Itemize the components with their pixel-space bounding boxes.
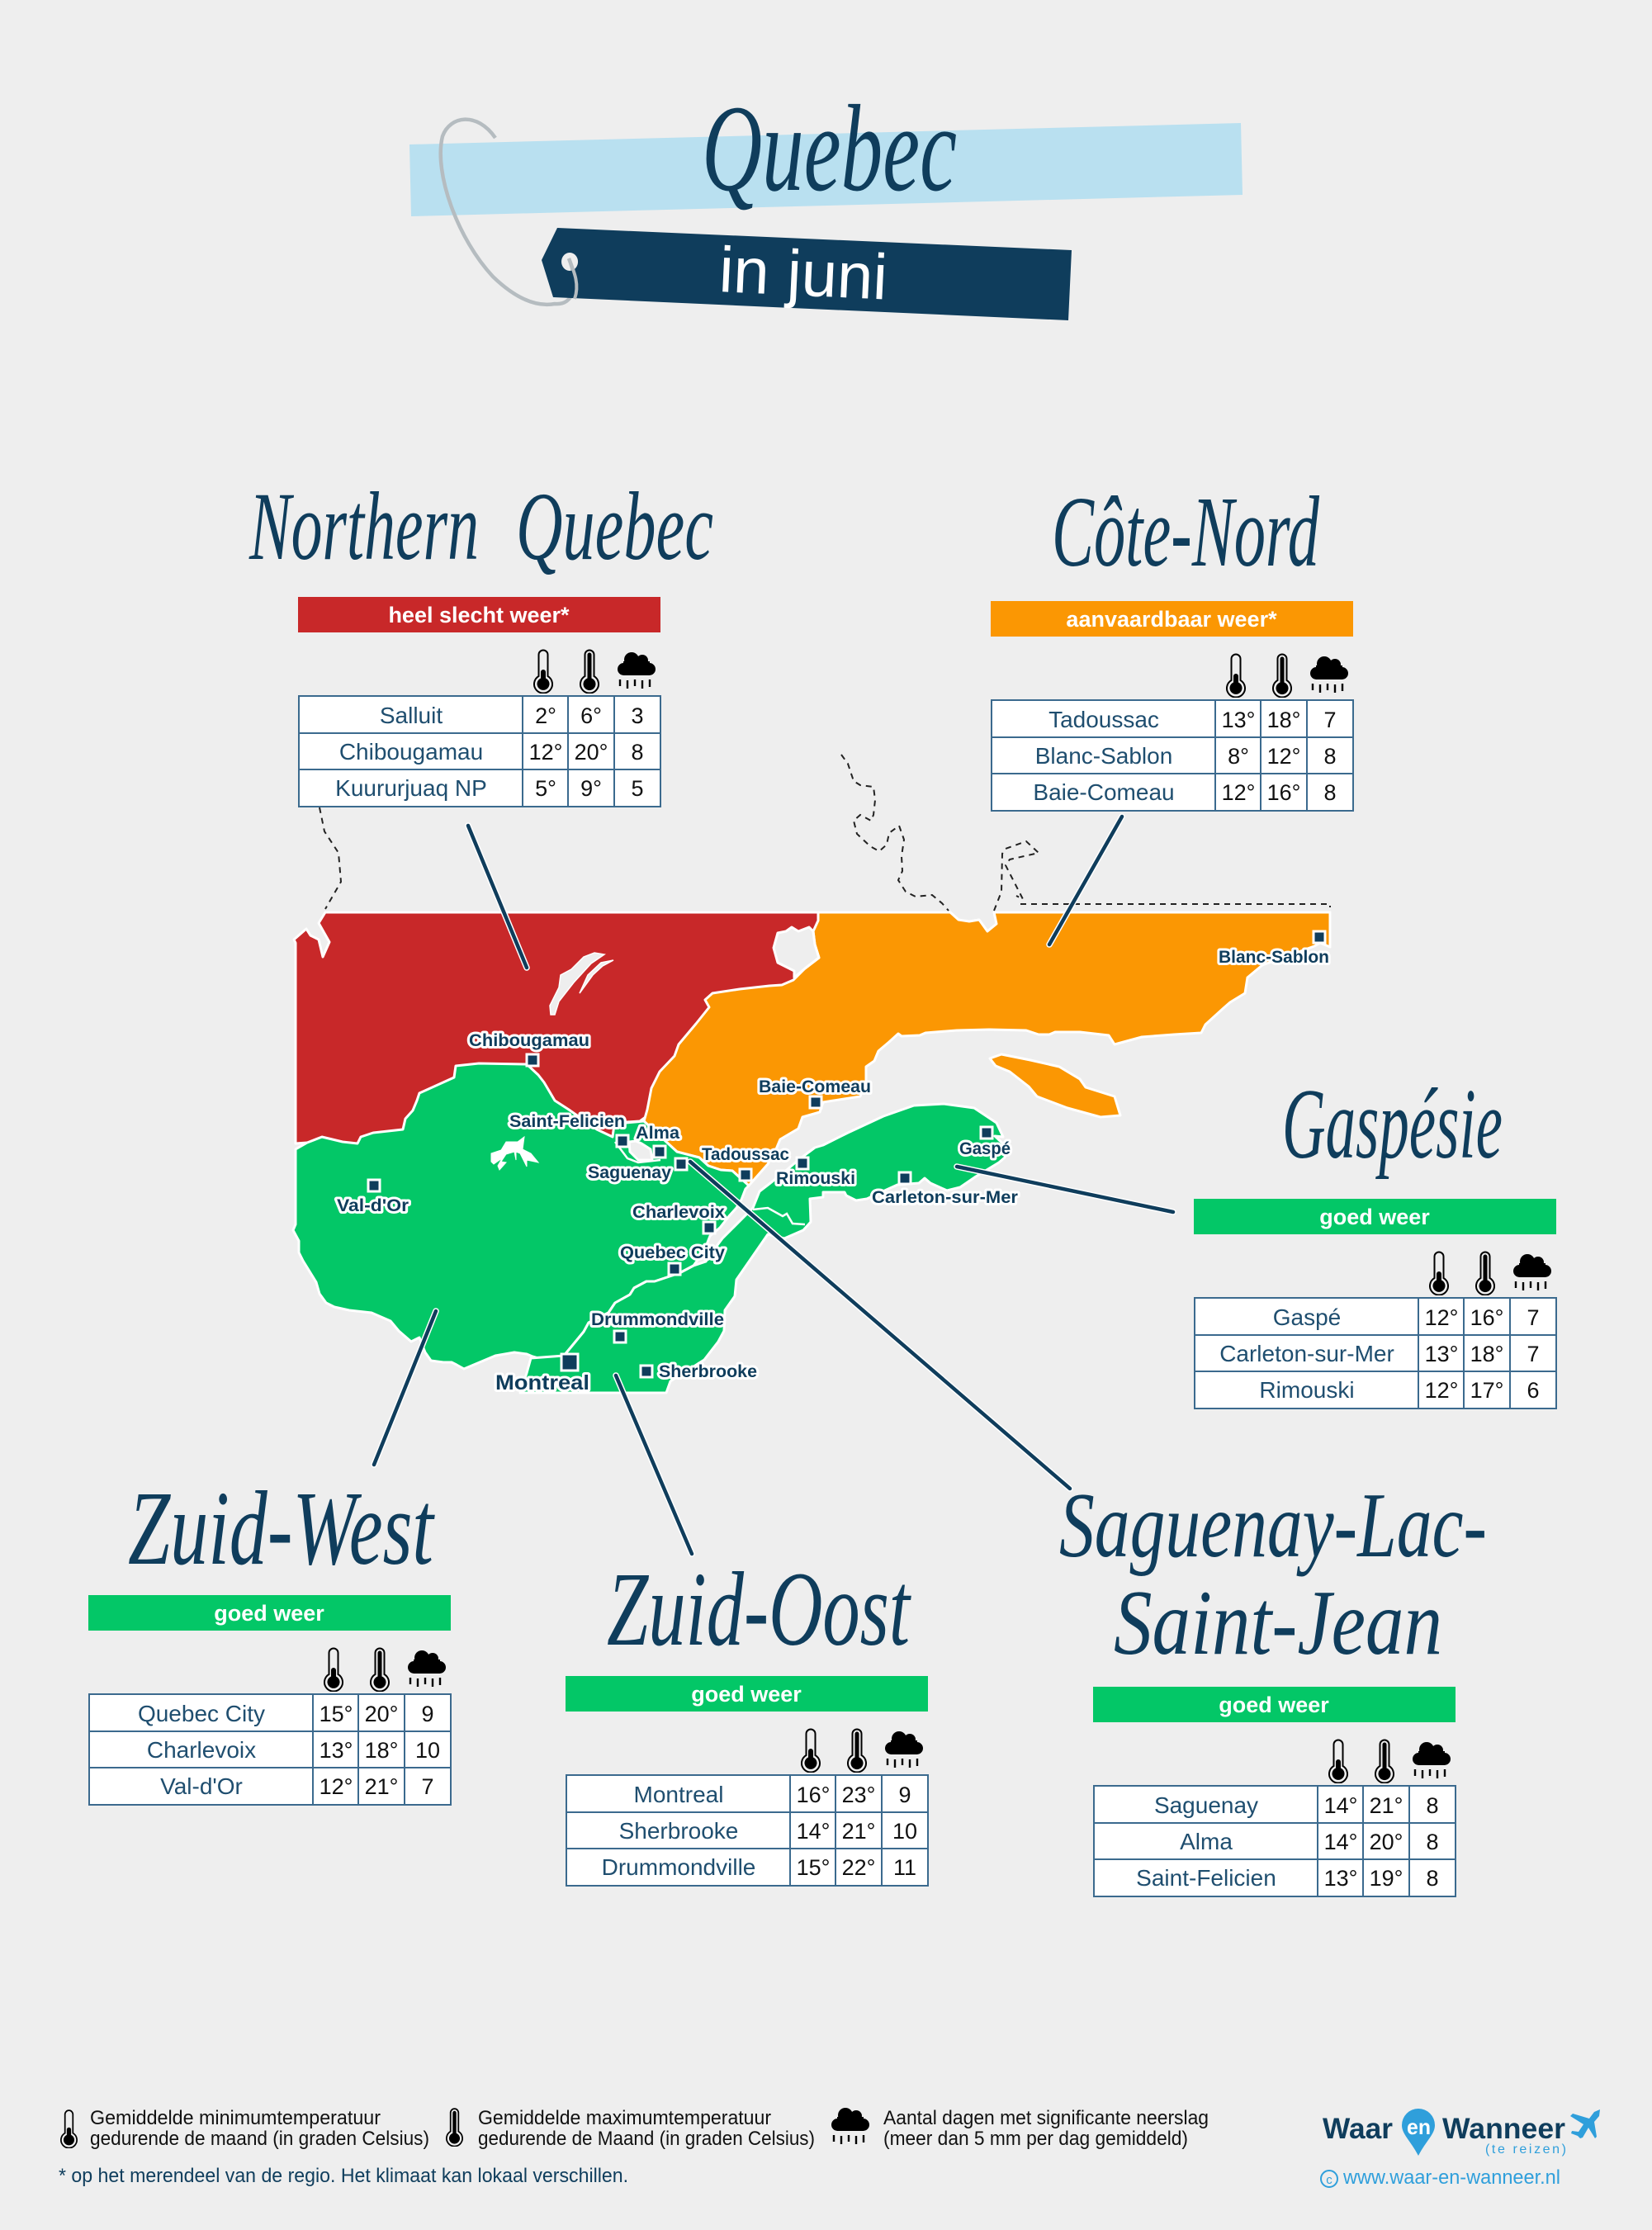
icons and table: 8 [631, 740, 644, 765]
city labels [337, 948, 1329, 1394]
weather band [991, 601, 1353, 637]
tag ring [441, 120, 574, 305]
icons and table: Carleton-sur-Mer [1219, 1341, 1394, 1366]
weather band [298, 597, 660, 632]
legend text: minimum temperature [90, 2107, 429, 2150]
city labels: Carleton-sur-Mer [872, 1188, 1018, 1207]
heading: Côte-Nord: Côte-Nord [1052, 476, 1320, 588]
weather band: goed weer [214, 1601, 324, 1626]
panel: Gaspésie [1194, 1068, 1556, 1409]
icons and table: 6 [1527, 1378, 1540, 1403]
city labels: Saint-Felicien [509, 1112, 625, 1131]
icons and table: 18° [365, 1738, 398, 1763]
city labels: Baie-Comeau [759, 1077, 871, 1096]
icons and table: 8 [1323, 780, 1337, 805]
weather band: goed weer [1319, 1205, 1430, 1229]
icons and table: 12° [1425, 1305, 1458, 1330]
legend text: rain: (meer dan 5 mm per dag gemiddeld) [883, 2128, 1188, 2150]
icons and table: 21° [842, 1819, 875, 1844]
footnote: * op het merendeel van de regio. Het klimaat kan lokaal verschillen. [59, 2165, 628, 2187]
icons and table: 16° [797, 1783, 830, 1807]
icons and table: 8 [1426, 1866, 1439, 1891]
city labels: Gaspé [959, 1139, 1011, 1158]
icons and table: Saguenay [1154, 1792, 1258, 1818]
weather band [566, 1676, 928, 1712]
icons and table: 16° [1470, 1305, 1503, 1330]
icons and table [992, 654, 1353, 811]
city markers [368, 931, 1325, 1377]
city labels: Montreal [495, 1371, 589, 1394]
icons and table: 10 [415, 1738, 440, 1763]
title: Quebec: Quebec [702, 80, 957, 217]
icons and table [299, 651, 660, 807]
icons and table: Tadoussac [1048, 707, 1159, 732]
panel: Zuid-West [88, 1470, 451, 1805]
icon: maximum temperature [447, 2109, 462, 2147]
icons and table: 16° [1267, 780, 1300, 805]
icons and table: Saint-Felicien [1136, 1865, 1276, 1891]
icons and table: 14° [797, 1819, 830, 1844]
icons and table: Quebec City [138, 1701, 265, 1726]
icons and table: 20° [575, 740, 608, 765]
panel: Côte-Nord [991, 476, 1353, 811]
icons and table: Val-d'Or [160, 1773, 243, 1799]
icons and table: 20° [365, 1702, 398, 1726]
icons and table: Blanc-Sablon [1035, 743, 1172, 769]
dashed borders [320, 755, 1330, 911]
lakes [491, 927, 819, 1170]
icons and table: 20° [1370, 1830, 1403, 1854]
weather band [1194, 1199, 1556, 1234]
city labels: Val-d'Or [337, 1196, 409, 1215]
icons and table: 9° [580, 776, 602, 801]
ring end over tag [569, 258, 576, 299]
icons and table: 22° [842, 1855, 875, 1880]
region: Northern Quebec [294, 912, 821, 1156]
icons and table: 6° [580, 703, 602, 728]
map of Quebec regions [293, 755, 1330, 1554]
icons and table: 14° [1324, 1793, 1357, 1818]
icons and table: 13° [1324, 1866, 1357, 1891]
month tag [542, 228, 1072, 320]
city labels: Charlevoix [632, 1203, 725, 1222]
panel: Saguenay-Lac-Saint-Jean [1059, 1475, 1487, 1896]
city labels: Quebec City [620, 1243, 725, 1262]
icons and table: 8 [1323, 744, 1337, 769]
icons and table: 12° [1267, 744, 1300, 769]
icons and table: 21° [1370, 1793, 1403, 1818]
city labels: Blanc-Sablon [1219, 948, 1329, 967]
legend text: maximum temperature: Gemiddelde maximumtemperatuur [478, 2107, 771, 2129]
icons and table: 21° [365, 1774, 398, 1799]
icons and table: 13° [1425, 1342, 1458, 1366]
weather band: goed weer [691, 1682, 802, 1707]
weather band [1093, 1687, 1456, 1722]
icons and table [566, 1729, 928, 1886]
icons and table [89, 1648, 451, 1805]
icon: rain [831, 2108, 869, 2144]
icons and table: 9 [898, 1783, 911, 1807]
icons and table: 3 [631, 703, 644, 728]
icons and table: 8 [1426, 1793, 1439, 1818]
icons and table: Sherbrooke [619, 1818, 738, 1844]
city labels: Saguenay [588, 1163, 671, 1182]
icons and table: 7 [1323, 708, 1337, 732]
heading: Zuid-Oost: Zuid-Oost [607, 1551, 911, 1668]
legend text: minimum temperature: Gemiddelde minimumtemperatuur [90, 2107, 381, 2129]
icons and table: 8° [1228, 744, 1249, 769]
icons and table: Montreal [634, 1782, 723, 1807]
logo: Waar en Wanneer: en [1407, 2114, 1431, 2139]
icons and table: Baie-Comeau [1033, 779, 1175, 805]
city labels: Chibougamau [469, 1031, 589, 1050]
icons and table: Chibougamau [339, 739, 483, 765]
icons and table: 15° [320, 1702, 353, 1726]
icons and table [1094, 1740, 1456, 1896]
icons and table: Charlevoix [147, 1737, 256, 1763]
heading: Gaspésie: Gaspésie [1282, 1068, 1503, 1180]
icons and table: 10 [892, 1819, 917, 1844]
legend [59, 2107, 1209, 2187]
icons and table: Drummondville [602, 1854, 755, 1880]
city labels: Drummondville [591, 1310, 724, 1329]
icons and table: 15° [797, 1855, 830, 1880]
panel: Northern Quebec [249, 472, 713, 807]
icon: map pin [1402, 2109, 1435, 2156]
icons and table: 2° [535, 703, 556, 728]
icons and table: 9 [421, 1702, 434, 1726]
regions: Zuid-West, Zuid-Oost, Gaspésie, Saguenay [293, 1063, 1009, 1393]
icons and table: 14° [1324, 1830, 1357, 1854]
weather band: heel slecht weer* [388, 603, 570, 627]
icons and table: 7 [1527, 1342, 1540, 1366]
icons and table: 7 [421, 1774, 434, 1799]
icons and table: 12° [320, 1774, 353, 1799]
city labels: Sherbrooke [659, 1362, 757, 1381]
weather band [88, 1595, 451, 1631]
icons and table: 13° [320, 1738, 353, 1763]
icons and table: 12° [529, 740, 562, 765]
city labels: Tadoussac [702, 1145, 789, 1164]
title block [409, 80, 1243, 320]
heading: Saguenay-Lac-Saint-Jean [1059, 1475, 1487, 1674]
icons and table: 5° [535, 776, 556, 801]
logo: Waar en Wanneer: Wanneer [1442, 2113, 1565, 2145]
icons and table: 18° [1470, 1342, 1503, 1366]
legend text: rain: Aantal dagen met significante neerslag [883, 2107, 1209, 2129]
weather band: aanvaardbaar weer* [1066, 607, 1277, 632]
panel: Zuid-Oost [566, 1551, 928, 1886]
copyright and url: www.waar-en-wanneer.nl [1342, 2166, 1560, 2189]
legend text: maximum temperature: gedurende de Maand (in graden Celsius) [478, 2128, 815, 2150]
icons and table: 13° [1222, 708, 1255, 732]
heading: Saguenay-Lac-Saint-Jean: Saguenay-Lac- [1059, 1475, 1487, 1577]
logo: Waar en Wanneer [1321, 2109, 1600, 2189]
icon: airplane [1570, 2109, 1600, 2138]
legend text: maximum temperature [478, 2107, 815, 2150]
title band [409, 123, 1243, 216]
icons and table: 12° [1425, 1378, 1458, 1403]
icons and table: Gaspé [1273, 1304, 1341, 1330]
icons and table: Kuururjuaq NP [335, 775, 487, 801]
icons and table: 5 [631, 776, 644, 801]
weather band: goed weer [1219, 1693, 1329, 1717]
subtitle: in juni: in juni [717, 233, 889, 314]
icon: minimum temperature [61, 2110, 77, 2148]
heading: Northern Quebec: Quebec [516, 472, 713, 580]
icons and table: 7 [1527, 1305, 1540, 1330]
icons and table: 12° [1222, 780, 1255, 805]
legend text: rain [883, 2107, 1209, 2150]
icons and table [1195, 1252, 1556, 1409]
city labels: Alma [636, 1124, 679, 1143]
icons and table: 8 [1426, 1830, 1439, 1854]
icons and table: 17° [1470, 1378, 1503, 1403]
icons and table: Salluit [380, 703, 443, 728]
copyright and url: c [1326, 2173, 1332, 2187]
city labels: Rimouski [776, 1169, 855, 1188]
heading: Saguenay-Lac-Saint-Jean: Saint-Jean [1114, 1572, 1442, 1674]
leader lines [374, 817, 1173, 1554]
region: Côte-Nord [644, 912, 1330, 1186]
legend text: minimum temperature: gedurende de maand (in graden Celsius) [90, 2128, 429, 2150]
icons and table: 11 [893, 1855, 916, 1880]
heading: Zuid-West: Zuid-West [128, 1470, 435, 1587]
icons and table: 23° [842, 1783, 875, 1807]
logo: Waar en Wanneer: (te reizen) [1485, 2142, 1566, 2157]
heading: Northern Quebec: Northern [249, 472, 479, 580]
icons and table: 19° [1370, 1866, 1403, 1891]
logo: Waar en Wanneer: Waar [1323, 2113, 1393, 2145]
icons and table: 18° [1267, 708, 1300, 732]
icons and table: Alma [1180, 1829, 1233, 1854]
icons and table: Rimouski [1259, 1377, 1355, 1403]
